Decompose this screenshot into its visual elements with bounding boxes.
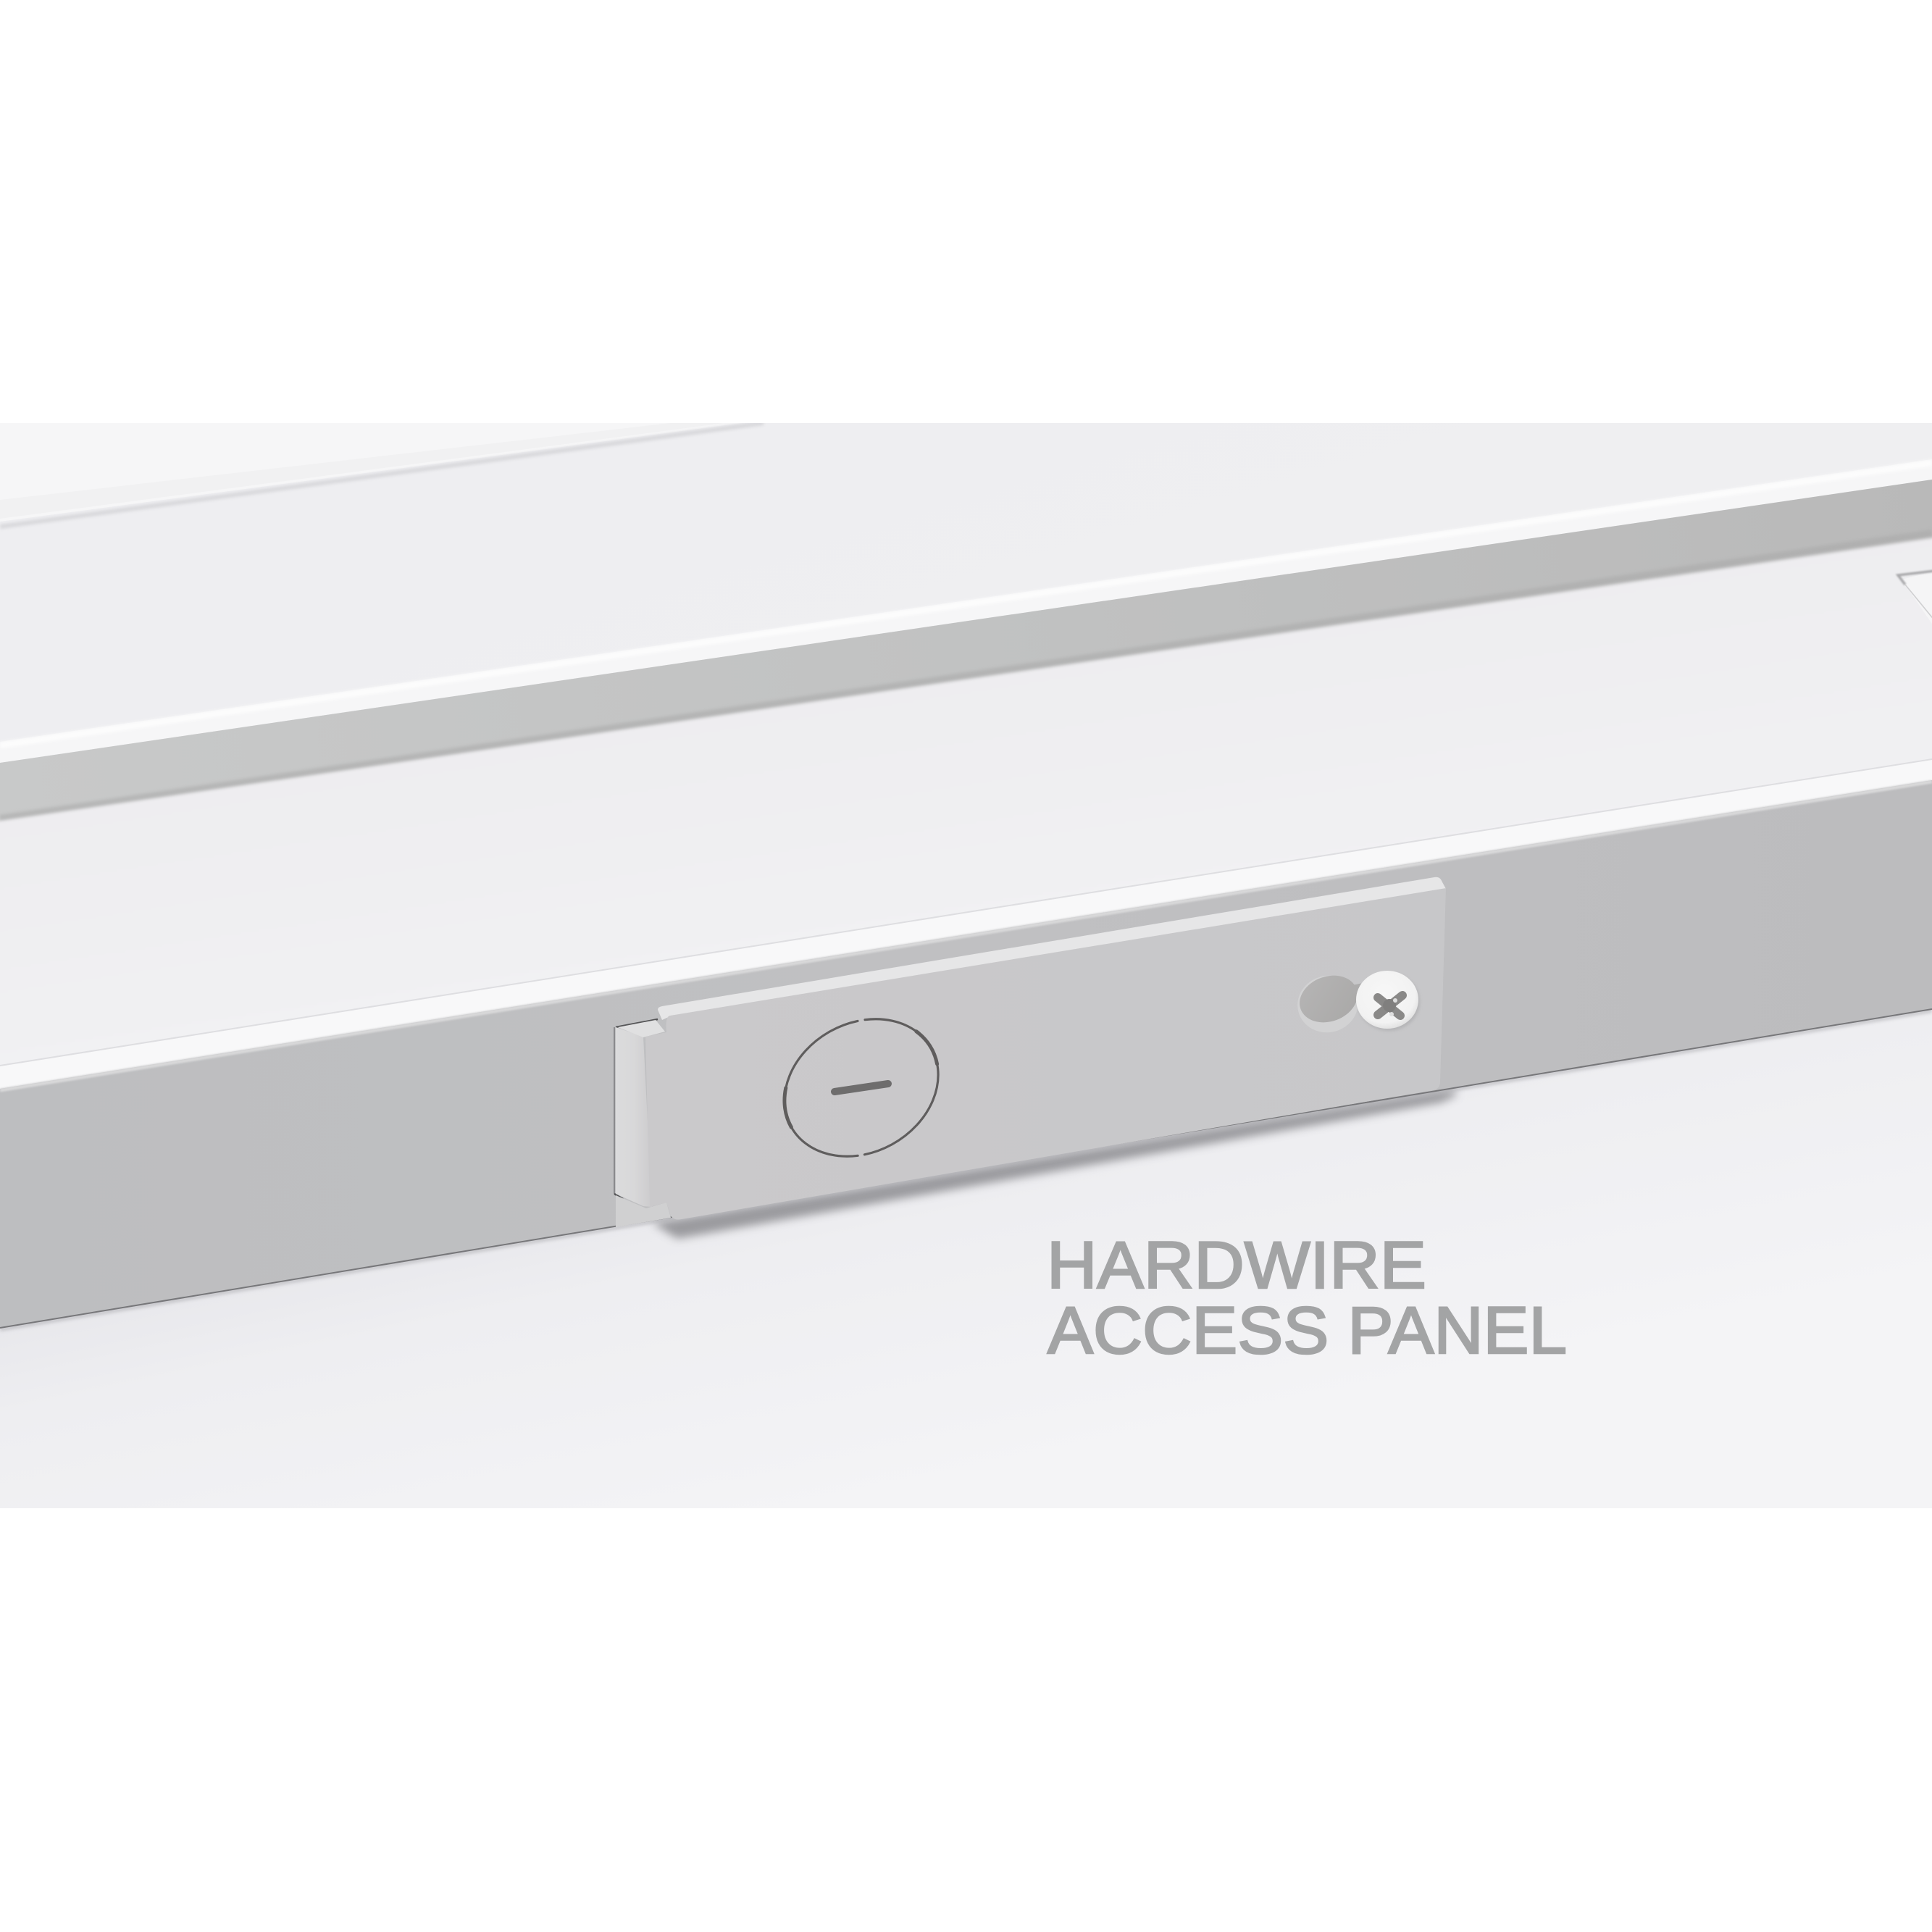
screw cross recess <box>1378 995 1402 1016</box>
knockout slot <box>835 1084 888 1092</box>
surface below the fixture <box>0 1010 1932 1508</box>
infographic canvas <box>0 423 1932 1508</box>
recessed channel face <box>0 480 1932 833</box>
far strip at top left <box>0 420 764 527</box>
lit wedge under tab <box>616 1195 671 1227</box>
keyhole opening <box>1291 968 1368 1040</box>
highlight ridge <box>0 459 1932 763</box>
round knockout <box>785 1019 938 1156</box>
hardwire access panel cover <box>614 877 1446 1227</box>
shadow line under fixture <box>0 1011 1932 1329</box>
corner cut-out at top right <box>1895 569 1932 618</box>
caption: hardwire access panel: ACCESS PANEL <box>1047 1294 1567 1368</box>
housing top surface <box>0 532 1932 1079</box>
cast shadow under access panel <box>652 1090 1456 1239</box>
top bevel of tab <box>618 1020 665 1037</box>
cover face <box>645 888 1446 1220</box>
caption: hardwire access panel: HARDWIRE <box>1047 1229 1426 1302</box>
mounting screw <box>1356 971 1420 1031</box>
housing front face <box>0 780 1932 1328</box>
product photo band <box>0 419 1932 1508</box>
upper surface of the light panel <box>0 419 1932 746</box>
top bevel of cover <box>658 877 1446 1020</box>
caption: hardwire access panel <box>1047 1229 1567 1368</box>
left tab <box>616 1027 652 1207</box>
shoulder of housing <box>0 759 1932 1089</box>
tab gap shadows <box>614 1019 658 1199</box>
